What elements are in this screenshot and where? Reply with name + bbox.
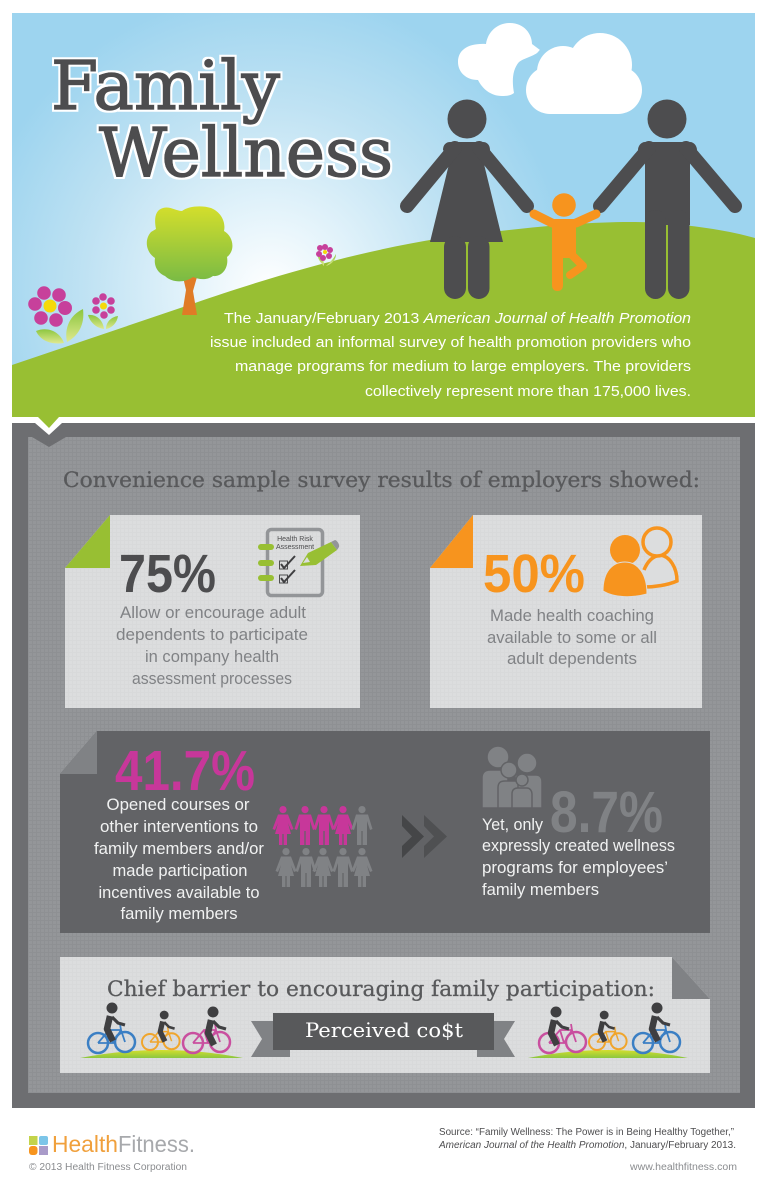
description: 8.7%: programs for employees’ [482, 859, 668, 877]
description: 8.7%: Yet, only [482, 816, 544, 834]
copyright: © 2013 Health Fitness Corporation [29, 1162, 187, 1173]
outer grey band [12, 423, 755, 1108]
stat: 50%: 50% [483, 544, 585, 604]
panel: 75% card [65, 515, 360, 708]
intro text: The January/February 2013 American Journal of Health Promotion [224, 310, 691, 327]
description: 41.7%: incentives available to [98, 884, 260, 902]
logo: HealthFitness: Health [52, 1131, 118, 1157]
source citation [438, 1127, 736, 1151]
icon: two people [603, 528, 677, 597]
pointer notch [32, 417, 66, 447]
icon: hill flower [316, 244, 336, 266]
description: 41.7%: family members and/or [94, 840, 265, 858]
description [116, 604, 308, 688]
icon: large flower [28, 286, 83, 343]
intro text [210, 310, 691, 400]
logo: HealthFitness: Fitness. [118, 1131, 195, 1157]
description: 8.7% [482, 816, 675, 899]
description: dependents to participate [116, 626, 308, 644]
source citation: American Journal of the Health Promotion, January/February 2013. [438, 1140, 736, 1151]
description: 41.7%: Opened courses or [106, 796, 250, 814]
ribbon: perceived cost: Perceived co$t [305, 1018, 463, 1042]
website: www.healthfitness.com [629, 1162, 737, 1173]
description: Made health coaching [490, 607, 654, 625]
description [487, 607, 657, 668]
panel: 50% card [430, 515, 702, 708]
description: available to some or all [487, 629, 657, 647]
green hill [12, 222, 755, 417]
title [51, 47, 393, 192]
icon: family group [482, 746, 542, 808]
tree [147, 206, 232, 315]
icon: health risk assessment clipboard: Assessment [276, 544, 314, 551]
ribbon: perceived cost [251, 1013, 515, 1057]
logo: HealthFitness [29, 1131, 195, 1157]
intro text: manage programs for medium to large employers. The providers [235, 358, 691, 375]
description: 41.7%: other interventions to [100, 818, 258, 836]
description: 41.7%: family members [120, 905, 238, 923]
title: Family [51, 47, 280, 125]
description: adult dependents [507, 650, 637, 668]
description: assessment processes [132, 670, 292, 688]
clouds [458, 23, 648, 121]
section heading: Convenience sample survey results of employers showed: [63, 468, 700, 492]
panel: header scene [12, 13, 755, 417]
description: 8.7%: family members [482, 881, 599, 899]
arrow: double chevron [402, 815, 447, 858]
description: in company health [145, 648, 279, 666]
icon: left cyclists [80, 1002, 243, 1058]
icon: right cyclists [528, 1002, 688, 1058]
icon: man figure [600, 100, 735, 299]
sky background [12, 13, 755, 417]
panel: survey results [12, 417, 755, 1108]
stat: 41.7%: 41.7% [115, 739, 255, 803]
title: Wellness [99, 114, 393, 192]
icon: people pictogram [272, 806, 372, 887]
stat: 75%: 75% [119, 544, 216, 604]
inner textured panel [28, 437, 740, 1093]
description: 41.7%: made participation [112, 862, 248, 880]
icon: health risk assessment clipboard: Health Risk [277, 536, 313, 543]
icon: woman figure [407, 100, 527, 299]
stat: 8.7%: 8.7% [550, 780, 663, 845]
panel: chief barrier [60, 957, 710, 1073]
footer [29, 1127, 737, 1173]
icon: small flower [88, 293, 118, 329]
intro text: collectively represent more than 175,000 lives. [365, 383, 691, 400]
description: Allow or encourage adult [120, 604, 306, 622]
barrier heading: Chief barrier to encouraging family participation: [107, 977, 655, 1002]
description: 41.7% [94, 796, 265, 923]
icon: health risk assessment clipboard [258, 530, 339, 596]
source citation: Source: “Family Wellness: The Power is in Being Healthy Together,” [439, 1127, 734, 1138]
panel: dark statistics card [60, 731, 710, 933]
icon: child figure [534, 193, 596, 291]
intro text: issue included an informal survey of health promotion providers who [210, 334, 691, 351]
description: 8.7%: expressly created wellness [482, 837, 675, 855]
